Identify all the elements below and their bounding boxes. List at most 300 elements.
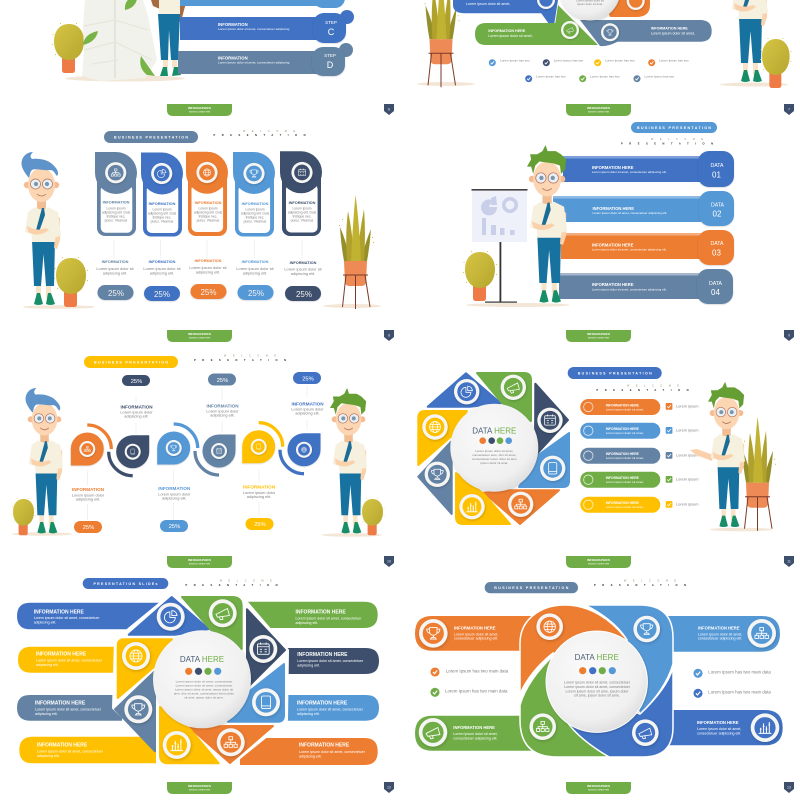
footer tab — [566, 330, 631, 342]
info light blue — [158, 486, 191, 532]
card 5: INFORMATION — [290, 261, 317, 265]
checklist: Lorem Ipsum has two — [659, 58, 689, 62]
data box 1: 01 — [712, 170, 721, 180]
card 3: Lorem ipsum dolor sit — [189, 265, 228, 270]
banner right 3 — [283, 695, 379, 721]
card 4: adipiscing elit. Duis — [241, 211, 269, 215]
info light blue: adipiscing elit. — [162, 496, 187, 500]
center circle: DATA HERE — [472, 426, 516, 436]
footer tab: INFOGRAPHICS — [587, 558, 610, 562]
footer tab: BUSINESS COMPANY HERE — [189, 110, 210, 114]
center circle: Lorem ipsum dolor sit amet, consectetuer — [564, 685, 631, 689]
data box 3 — [698, 230, 734, 265]
header — [84, 354, 286, 368]
blue segment — [532, 0, 558, 30]
list row 4: Lorem ipsum — [676, 476, 698, 482]
banner blue: consectetuer adipiscing elit. — [697, 731, 741, 735]
step D box: STEP — [324, 53, 336, 58]
ribbon: step B — [180, 0, 345, 8]
checklist left: Lorem Ipsum has two main data — [445, 688, 508, 694]
plant on stand — [741, 417, 776, 531]
banner right 2: adipiscing elit. — [297, 664, 320, 668]
ribbon 1 — [563, 156, 701, 182]
banner right 4: INFORMATION HERE — [299, 742, 350, 748]
info navy: INFORMATION — [120, 404, 153, 410]
step C box — [313, 10, 354, 43]
page number: 9 — [788, 334, 790, 338]
data box 3: DATA — [710, 241, 724, 247]
center circle: Lorem ipsum dolor sit amet, — [475, 449, 514, 453]
octagon segments — [418, 373, 569, 524]
checklist: Lorem Ipsum has two — [644, 74, 674, 78]
header: WELCOME — [651, 138, 703, 141]
list row 2: Lorem ipsum — [676, 428, 698, 432]
banner left 2: INFORMATION HERE — [36, 652, 87, 658]
info navy: Lorem ipsum dolor — [120, 410, 153, 414]
header — [621, 122, 717, 146]
page number — [384, 330, 394, 341]
info blue — [291, 372, 324, 416]
page number — [784, 104, 794, 115]
header: BUSINESS PRESENTATION — [114, 135, 188, 139]
icon rings — [122, 599, 280, 759]
step 3 light blue — [157, 424, 198, 464]
footer tab: BUSINESS COMPANY HERE — [588, 336, 609, 340]
footer tab — [167, 104, 232, 116]
banner left 2 — [18, 647, 122, 673]
banner left 1: Lorem ipsum dolor sit amet, consectetuer — [34, 616, 100, 620]
card 1: tristique nec, — [107, 215, 125, 219]
list row 5 — [580, 497, 698, 513]
checklist: Lorem Ipsum has two — [536, 74, 566, 78]
card 1: INFORMATION — [102, 260, 129, 264]
header: WELCOME — [243, 130, 295, 133]
list row 2 — [580, 423, 698, 439]
header: BUSINESS PRESENTATION — [637, 126, 711, 130]
info blue: adipiscing elit. — [295, 410, 320, 416]
header — [568, 367, 689, 392]
data box 3: 03 — [712, 248, 721, 258]
list row 5: INFORMATION HERE — [606, 501, 640, 505]
ground shadows — [417, 82, 788, 86]
checklist left: Lorem Ipsum has two main data — [446, 668, 509, 674]
card 3: purus. Vivamus — [197, 219, 220, 223]
ribbon 2: Lorem ipsum dolor sit amet, consectetuer adipiscing elit. — [592, 211, 667, 215]
header — [104, 130, 306, 143]
page number — [784, 556, 794, 567]
data box 4: DATA — [709, 281, 723, 287]
banner left 2: Lorem ipsum dolor sit amet, consectetuer — [36, 658, 103, 662]
footer tab — [566, 556, 631, 568]
person: legs and torso — [151, 0, 187, 76]
card 1: Lorem ipsum dolor sit — [96, 266, 135, 271]
banner left 4: Lorem ipsum dolor sit amet, consectetuer — [37, 750, 104, 754]
list row 1: Lorem ipsum dolor sit amet, — [606, 408, 644, 412]
step C box: STEP — [325, 20, 337, 25]
footer tab — [167, 556, 232, 568]
card 3: adipiscing elit. Duis — [194, 210, 222, 214]
cacti — [12, 498, 384, 535]
list row 3: Lorem ipsum dolor sit amet, — [606, 456, 644, 460]
cactus — [463, 251, 497, 301]
data box 1 — [698, 151, 734, 187]
checklist right: Lorem Ipsum has two main data — [708, 690, 771, 694]
center circle — [153, 630, 251, 728]
dotted connectors — [88, 386, 307, 520]
footer tab: INFOGRAPHICS — [188, 106, 211, 110]
banner orange: INFORMATION HERE — [454, 626, 496, 630]
footer tab: BUSINESS COMPANY HERE — [588, 562, 609, 566]
blue-hair man — [21, 152, 61, 305]
footer tab — [167, 782, 232, 794]
presentation board — [472, 189, 528, 303]
info yellow: INFORMATION — [243, 484, 276, 490]
center circle: Lorem ipsum dolor sit amet, consectetuer — [176, 684, 232, 688]
green-hair man — [527, 145, 567, 303]
card 1: adipiscing elit. — [103, 270, 127, 276]
info yellow: Lorem ipsum dolor — [243, 490, 276, 495]
header: PRESENTATION — [594, 583, 686, 587]
slide 6: steps with paper stack — [52, 0, 394, 116]
step C text: INFORMATION — [218, 22, 248, 27]
blue text: Lorem ipsum dolor sit amet, — [466, 2, 510, 6]
banner right 3: INFORMATION HERE — [297, 700, 348, 706]
card 4: 25% — [248, 289, 264, 298]
banner left 3 — [17, 695, 122, 721]
card 1: 25% — [108, 289, 124, 298]
step 1 orange — [71, 425, 111, 466]
banner right 2 — [283, 648, 379, 674]
page number — [784, 782, 794, 793]
cactus — [760, 38, 791, 88]
footer tab: INFOGRAPHICS — [587, 106, 610, 110]
info blue: 25% — [302, 376, 314, 382]
ribbon 3 — [561, 233, 701, 259]
ground shadow — [466, 303, 570, 307]
card 5: Lorem ipsum — [292, 206, 312, 210]
header — [83, 578, 278, 589]
list row 3: INFORMATION HERE — [606, 452, 640, 456]
step D box: D — [327, 60, 334, 70]
footer tab: INFOGRAPHICS — [188, 558, 211, 562]
swirl rings — [529, 613, 660, 746]
banner left 4 — [19, 737, 157, 763]
data box 2: 02 — [713, 210, 722, 218]
center circle: ipsum dolor sit ama. — [577, 2, 603, 6]
ribbon 2 — [553, 196, 701, 222]
ground shadow — [65, 76, 185, 82]
footer tab: INFOGRAPHICS — [188, 332, 211, 336]
list row 1: Lorem ipsum — [676, 404, 698, 408]
step D text — [218, 56, 290, 64]
list row 4: INFORMATION HERE — [606, 476, 640, 480]
header: PRESENTATION — [596, 388, 689, 392]
center circle: Lorem ipsum dolor sit ame, ipsum dolor sit — [175, 688, 233, 692]
banner left 1: adipiscing elit. — [34, 620, 56, 624]
ribbon 4: Lorem ipsum dolor sit amet, consectetuer adipiscing elit. — [592, 288, 667, 292]
green-hair man — [330, 388, 367, 533]
card 2 — [141, 152, 183, 301]
info yellow: 25% — [254, 522, 266, 528]
center circle: ipsum dolor sit ama. — [480, 461, 508, 465]
data box 1: DATA — [710, 163, 724, 169]
footer tab — [566, 782, 631, 794]
banner green: INFORMATION HERE — [453, 725, 495, 730]
banner left 3: Lorem ipsum dolor sit amet, consectetuer — [35, 708, 102, 712]
slate text — [651, 26, 695, 36]
center circle — [546, 631, 647, 732]
list row 3: Lorem ipsum — [676, 452, 698, 458]
info orange: Lorem ipsum dolor — [72, 492, 105, 498]
slide 10: wave timeline — [12, 354, 394, 568]
icon rings — [422, 375, 565, 519]
banner right 2: INFORMATION HERE — [297, 652, 348, 658]
banner light blue: Lorem ipsum dolor sit amet, — [698, 632, 742, 636]
info slate: adipiscing elit. — [210, 412, 235, 418]
card 1: INFORMATION — [103, 200, 130, 204]
footer tab — [167, 330, 232, 342]
header: WELCOME — [224, 354, 276, 358]
info orange: 25% — [83, 525, 94, 531]
step C box: C — [328, 27, 335, 37]
page number: 10 — [387, 560, 391, 564]
page number: 6 — [388, 108, 390, 112]
banner right 4: Lorem ipsum dolor sit amet, consectetuer — [299, 750, 366, 754]
info light blue: Lorem ipsum dolor — [158, 492, 191, 496]
banner right 4: adipiscing elit. — [299, 754, 322, 758]
card 5: purus. Vivamus — [291, 219, 314, 223]
info blue: INFORMATION — [291, 402, 324, 406]
card 2: INFORMATION — [149, 202, 176, 206]
list row 2: INFORMATION HERE — [606, 427, 640, 431]
info slate — [206, 374, 239, 418]
orange banner — [600, 0, 650, 17]
paper stack — [82, 0, 157, 81]
card 2: adipiscing elit. — [150, 270, 174, 276]
checklist: Lorem Ipsum has two — [590, 74, 620, 78]
banner light blue: consectetuer adipiscing elit. — [698, 637, 742, 641]
info slate: Lorem ipsum dolor — [206, 408, 239, 414]
header: WELCOME — [624, 580, 676, 582]
data box 4 — [697, 269, 733, 304]
list row 1 — [580, 399, 698, 415]
checklist left — [430, 667, 509, 697]
center circle: Lorem ipsum dolor sit ame, ipsum dolor — [566, 689, 629, 693]
page number: 12 — [387, 786, 391, 790]
info yellow — [243, 484, 276, 530]
card 1: purus. Vivamus — [105, 219, 128, 223]
data box 2 — [699, 191, 734, 226]
center circle: sit ame, ipsum dolor sit ame. — [574, 694, 620, 698]
card 3: INFORMATION — [195, 259, 222, 263]
slide 9: data ribbons with presenter — [463, 122, 794, 342]
checklist: Lorem Ipsum has two — [554, 58, 584, 62]
footer tab — [566, 104, 631, 116]
plant on stand — [339, 195, 374, 309]
ribbon 3: INFORMATION HERE — [592, 242, 634, 248]
card 5 — [280, 151, 323, 301]
banner left 3: INFORMATION HERE — [35, 700, 86, 706]
card 2: INFORMATION — [149, 260, 176, 264]
center circle: DATA HERE — [575, 653, 619, 662]
info orange: adipiscing elit. — [76, 496, 100, 502]
card 3: 25% — [200, 288, 217, 297]
checklist: Lorem Ipsum has two — [500, 58, 530, 62]
card 4: Lorem ipsum dolor sit — [236, 266, 275, 271]
info light blue: 25% — [169, 524, 180, 530]
banner left 4: adipiscing elit. — [37, 754, 60, 758]
icon: cactus — [52, 23, 86, 73]
card 2: adipiscing elit. Duis — [148, 211, 176, 215]
banner right 1: INFORMATION HERE — [296, 610, 346, 616]
footer tab: INFOGRAPHICS — [188, 784, 211, 788]
ribbon 1: Lorem ipsum dolor sit amet, consectetuer adipiscing elit. — [592, 170, 667, 174]
icon: money leaves — [83, 0, 155, 76]
ribbon: step D — [178, 43, 353, 76]
header: WELCOME — [627, 384, 679, 388]
slide 8: five info cards — [21, 130, 394, 342]
green text: INFORMATION HERE — [488, 29, 526, 33]
green text: Lorem ipsum dolor sit amet, — [488, 34, 533, 38]
list row 3 — [580, 448, 698, 464]
green banner — [475, 23, 565, 45]
center circle — [560, 0, 620, 20]
page number: 7 — [788, 108, 790, 112]
green text — [488, 29, 533, 38]
card 2: Lorem ipsum — [152, 207, 172, 211]
card 4: purus. Vivamus — [244, 220, 267, 224]
banner left 3: adipiscing elit. — [35, 712, 58, 716]
slide 12: octagon with side banners — [17, 578, 394, 794]
green-hair man pointing — [690, 382, 745, 527]
banner orange: Lorem ipsum dolor sit amet, — [454, 632, 498, 636]
card 3: tristique nec, — [199, 215, 217, 219]
footer tab: BUSINESS COMPANY HERE — [189, 336, 210, 340]
banner right 3: adipiscing elit. — [297, 712, 320, 716]
list row 4 — [580, 472, 698, 488]
footer tab: BUSINESS COMPANY HERE — [189, 788, 210, 792]
list row 5: Lorem ipsum — [676, 502, 698, 506]
card 5: 25% — [296, 290, 312, 299]
header — [485, 580, 686, 593]
step D box — [312, 43, 353, 76]
card 3: adipiscing elit. — [196, 270, 220, 274]
banner right 1 — [245, 602, 378, 628]
ribbon 4 — [559, 273, 699, 299]
ribbon 2: INFORMATION HERE — [592, 206, 634, 211]
card 4: Lorem ipsum — [245, 207, 265, 211]
cactus — [54, 257, 88, 307]
header: PRESENTATION — [186, 583, 278, 587]
ground shadows — [12, 532, 382, 537]
info orange: INFORMATION — [72, 487, 105, 492]
list row 5: Lorem ipsum dolor sit amet, — [606, 505, 644, 509]
center circle — [450, 404, 538, 492]
slide 7: circular diagram with checklist — [417, 0, 794, 116]
page number — [384, 104, 394, 115]
card 5: tristique nec, — [293, 215, 311, 219]
banner blue: Lorem ipsum dolor sit amet, — [697, 727, 741, 731]
info navy: 25% — [131, 379, 142, 385]
card 2: 25% — [154, 290, 170, 299]
page number: 13 — [787, 786, 791, 790]
header: PRESENTATION — [214, 133, 306, 137]
blue banner — [440, 0, 545, 13]
info navy: adipiscing elit. — [124, 414, 149, 418]
ribbon 4: INFORMATION HERE — [592, 282, 634, 287]
ribbon 1: INFORMATION HERE — [592, 165, 634, 170]
banner orange: consectetuer adipiscing elit. — [454, 637, 498, 641]
center circle: sit ame, ipsum dolor sit ame. — [184, 696, 224, 700]
banner green — [415, 716, 537, 751]
ground shadows — [23, 304, 381, 309]
octagon segments — [113, 594, 288, 766]
banner right 3: Lorem ipsum dolor sit amet, consectetuer — [297, 708, 364, 712]
ground shadow — [710, 528, 772, 531]
slate text: Lorem ipsum dolor sit amet, — [651, 32, 695, 36]
card 2: tristique nec, — [153, 216, 171, 220]
footer tab: INFOGRAPHICS — [587, 332, 610, 336]
card 5: INFORMATION — [289, 201, 316, 205]
ribbon 3: Lorem ipsum dolor sit amet, consectetuer adipiscing elit. — [592, 248, 667, 252]
green segment — [555, 5, 598, 45]
slide 13: swirl with four banners — [415, 580, 794, 794]
header: PRESENTATION SLIDEs — [94, 582, 158, 586]
step 4 slate — [195, 434, 236, 475]
slide 11: octagon diagram with list — [418, 367, 794, 568]
data box 4: 04 — [711, 288, 720, 297]
banner left 4: INFORMATION HERE — [37, 742, 88, 748]
page number — [384, 782, 394, 793]
step 6 blue — [280, 433, 320, 474]
center circle: DATA HERE — [180, 655, 224, 664]
banner left 1: INFORMATION HERE — [34, 610, 85, 616]
footer tab: BUSINESS COMPANY HERE — [189, 562, 210, 566]
info yellow: adipiscing elit. — [247, 494, 271, 499]
list row 2: Lorem ipsum dolor sit amet, — [606, 431, 644, 435]
slate segment — [580, 20, 640, 46]
ribbon: step C — [180, 10, 354, 43]
banner left 1 — [17, 603, 163, 629]
card 4 — [233, 152, 275, 300]
card 3 — [186, 152, 228, 299]
banner light blue — [663, 616, 780, 652]
center circle: consectetuer lorem dolor sit ame — [472, 457, 517, 461]
green-hair man (lower part) — [731, 0, 768, 82]
page number — [384, 556, 394, 567]
info slate: INFORMATION — [206, 404, 239, 408]
swirl segments — [520, 605, 673, 757]
step D text: INFORMATION — [218, 56, 248, 60]
card 5: adipiscing elit. Duis — [288, 210, 316, 214]
banner orange — [415, 616, 533, 651]
header: PRESENTATION — [194, 358, 286, 362]
list row 4: Lorem ipsum dolor sit amet, — [606, 480, 644, 484]
center circle: ame, dior sit amet, consectetuer lorem dolor — [174, 692, 234, 696]
header: BUSINESS PRESENTATION — [494, 586, 569, 590]
card 5: adipiscing elit. — [291, 271, 315, 276]
info navy — [120, 375, 153, 418]
card 2: purus. Vivamus — [151, 220, 174, 224]
card 2: Lorem ipsum dolor sit — [143, 266, 182, 271]
step D text: Lorem ipsum dolor sit amet, consectetuer adipiscing — [218, 60, 290, 64]
card 4: INFORMATION — [242, 202, 269, 206]
footer tab: BUSINESS COMPANY HERE — [588, 788, 609, 792]
step 5 yellow — [242, 423, 283, 463]
plant on stand — [424, 0, 460, 87]
card 1 — [95, 152, 137, 300]
card 1: Lorem ipsum — [106, 206, 126, 210]
